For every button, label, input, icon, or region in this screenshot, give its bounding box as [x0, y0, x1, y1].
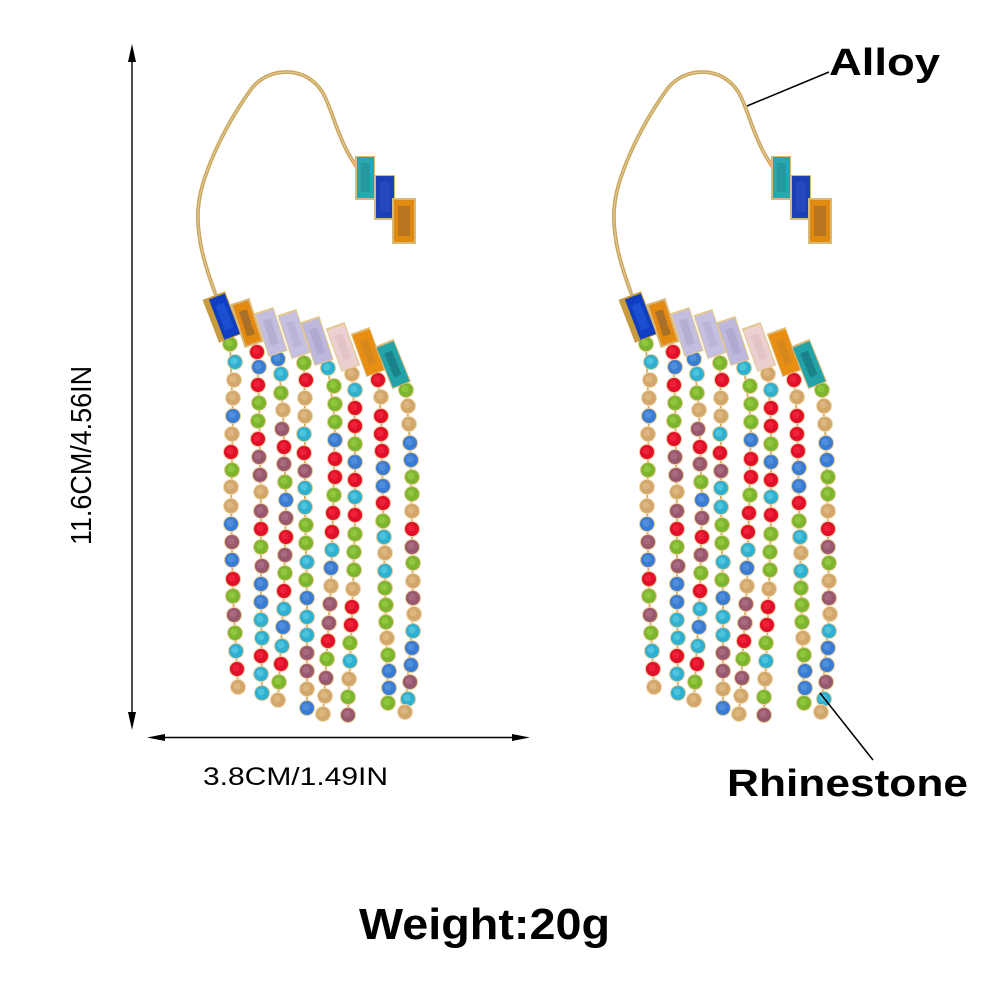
height label: 11.6CM/4.56IN [66, 366, 98, 545]
rhinestone label: Rhinestone [727, 763, 968, 805]
weight label: Weight:20g [359, 900, 610, 949]
width dimension arrow [147, 734, 530, 741]
left earring [198, 72, 422, 723]
alloy label: Alloy [829, 42, 940, 84]
height dimension arrow [128, 44, 136, 730]
alloy leader line [747, 72, 829, 106]
right earring [614, 72, 838, 723]
width label: 3.8CM/1.49IN [203, 763, 388, 791]
rhinestone leader line [820, 693, 873, 760]
